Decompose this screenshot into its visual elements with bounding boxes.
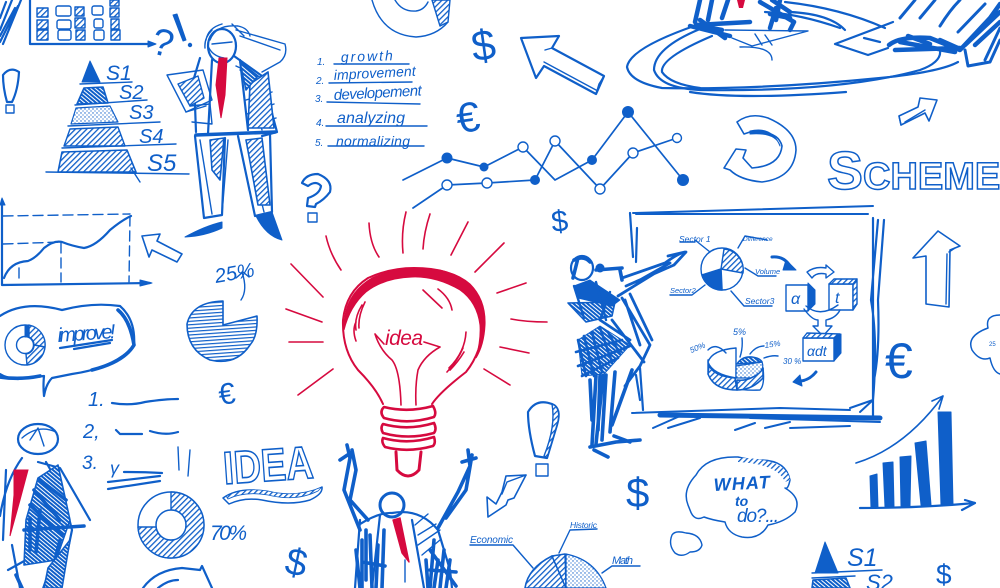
legs [590,370,632,445]
icon: arrow down left [487,475,526,517]
cube t [829,284,853,310]
filament text: idea: idea [385,327,423,350]
text: to: to [735,493,749,509]
rays [286,212,547,395]
collar [568,302,615,322]
icon: euro small: € [216,377,238,412]
numbered list [315,47,427,149]
pyramid chart S1 to S5 [46,61,189,182]
presentation board [630,206,884,430]
pie fragment top [372,0,450,37]
icon: cloud right edge [971,315,1000,374]
label: Economic: Economic [470,535,513,546]
label: 50%: 50% [689,341,707,355]
bar chart with rising arrow [856,396,975,510]
figure: confused businessman with paper [167,24,286,240]
label: 5%: 5% [733,327,746,337]
text improve: improve! [57,321,117,347]
label: S2: S2 [119,82,143,104]
bulb tip [396,452,421,476]
filament [375,334,440,405]
label: 70%: 70% [210,522,247,545]
text: question and exclamation marks: ? [147,21,178,66]
title: SCHEME: SCHEME [827,141,1000,201]
chart: area curve [0,198,152,286]
label: Math: Math [612,555,633,567]
figure: businessman arms up [340,445,476,588]
text: question and exclamation marks [147,14,192,66]
seated person right [889,4,1000,52]
item 5: normalizing [336,133,410,149]
seated person left [690,0,794,38]
figure: businessman bottom left [0,424,90,588]
label: S1: S1 [106,62,132,85]
flow cubes: αdt [807,343,828,359]
flow cubes: α [791,291,801,308]
label: 15%: 15% [764,339,781,350]
pie chart: 25 percent [187,259,257,361]
text: do?...: do?... [737,506,779,527]
pie sector chart [670,234,780,306]
exclamation marks [178,447,190,476]
item 1: growth [341,47,393,65]
item 4: 4. [316,118,324,129]
icon: dollar bottom: $ [282,541,311,586]
item 2: improvement [333,63,417,83]
label: Historic: Historic [570,520,598,530]
thought cloud: what to do [686,457,797,538]
label: S1: S1 [847,544,878,572]
sector label: Sector 2: Sector2 [670,286,697,295]
item 3: 3. [315,94,323,105]
text: IDEA banner: IDEA [222,436,315,494]
item 1 [317,47,409,68]
text: WHAT: WHAT [713,472,772,495]
bulb screw base [382,406,436,450]
torso [578,326,630,376]
pie with labels [470,520,640,588]
label: 25%: 25% [212,259,256,288]
3D pie chart [689,327,801,390]
flow cubes: t [835,290,840,307]
thick rim [344,268,485,358]
flow cubes [772,257,857,386]
shoes [185,222,222,237]
highlights [354,289,466,372]
icon: small arrow up right [899,98,937,125]
icon: circular arrow [724,116,796,182]
top right table scene [627,0,1000,96]
icon: dollar: $ [468,21,499,72]
chart: square grid with axis [30,0,156,47]
tie [10,470,28,536]
necktie [216,58,227,118]
icon: euro right: € [885,333,913,389]
line 1: 1. [88,389,105,411]
item 2: 2. [315,76,324,87]
sector label: Volume: Volume [755,267,780,276]
icon: euro: € [453,92,483,142]
figure: presenter [568,252,686,457]
icon: cloud right edge: 25 [989,342,996,348]
label: S4: S4 [139,126,163,148]
icon: dollar near board: $ [550,204,570,239]
scribble: top left corner [0,0,21,44]
feet [590,436,640,457]
icon: exclamation left [3,70,19,113]
donut in bubble [5,325,45,365]
item 4: analyzing [337,110,405,127]
item 5 [315,133,424,149]
shape: arrow fragment bottom [143,566,212,588]
sector label: Sector 1: Sector 1 [679,234,711,244]
item 1: 1. [317,57,325,68]
icon: arrow up left small [142,234,182,262]
line 2: 2, [82,421,100,443]
line 3 [82,453,162,489]
icon: dollar near pie: $ [626,469,649,516]
papers on table [725,30,808,60]
red tie fragment [737,0,745,8]
connector arrow [804,305,840,336]
icon: big arrow up left [521,36,604,94]
line 3: 3. [82,453,98,474]
cube alpha [786,285,808,311]
pointing arm [618,252,686,296]
icon: question mark with box [302,174,330,222]
icon: small cloud [671,532,702,555]
arrow up large [913,231,960,307]
donut chart: 70 percent [138,492,247,558]
icon: exclamation center [528,402,559,476]
pyramid fragment bottom right [812,542,893,588]
lightbulb [286,212,547,476]
speech bubble: improve [0,305,134,396]
item 2 [315,63,417,87]
item 3: developement [333,82,423,104]
label: S3: S3 [129,102,153,124]
item 5: 5. [315,138,323,149]
line 3: γ [110,458,120,478]
handwritten list 1 to 3 [82,389,190,489]
label: 30%: 30 % [783,357,801,366]
sector label: Difference: Difference [743,236,773,243]
item 4 [316,110,427,129]
cube alpha dt [803,338,834,361]
label: S5: S5 [147,150,177,177]
line chart [403,106,689,208]
necktie [393,518,409,562]
paper held by the man [167,70,212,112]
sector label: Sector 3: Sector3 [745,296,775,306]
bulb glass [343,268,484,404]
